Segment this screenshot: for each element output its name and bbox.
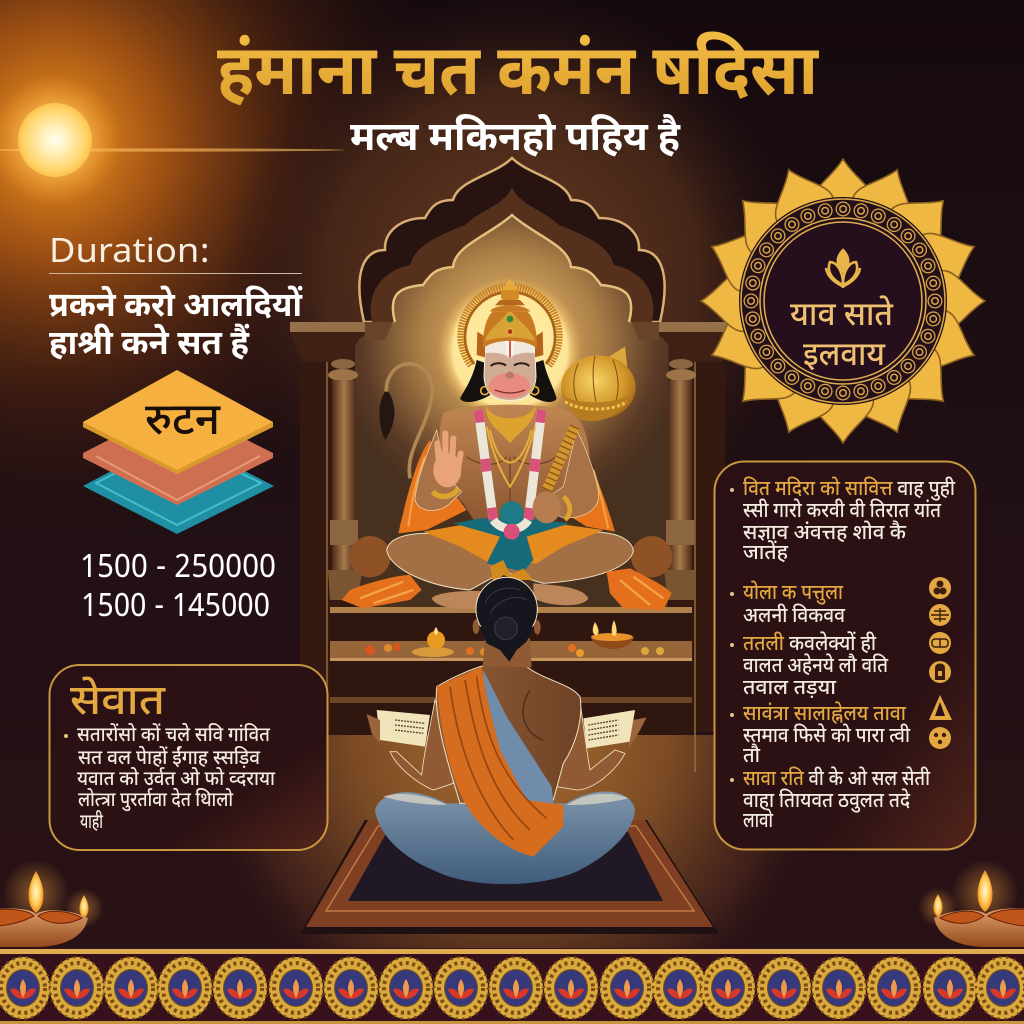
range numbers xyxy=(80,549,276,630)
crossed legs xyxy=(387,532,633,590)
arms xyxy=(415,430,599,518)
seated legs xyxy=(375,792,635,884)
duration block: हाश्री कने सत हैं xyxy=(49,323,250,368)
neck xyxy=(483,638,532,667)
temple architecture xyxy=(300,158,725,772)
middle arch band xyxy=(371,187,653,322)
title: हंमाना चत कमंन षदिसा xyxy=(217,31,819,123)
duration label: Duration: xyxy=(49,232,210,276)
halo xyxy=(435,275,585,425)
icon: three dots xyxy=(929,727,951,749)
outer scalloped arch xyxy=(359,158,665,322)
stacked layers icon xyxy=(83,370,274,534)
fruit offerings behind xyxy=(349,536,672,577)
torso xyxy=(439,405,590,525)
offerings plate and lit bowl on shelf xyxy=(365,620,664,657)
bullet points: सज्ञाव अंवत्तह शोव कै xyxy=(743,520,906,548)
lit niche xyxy=(355,215,668,610)
orange sash xyxy=(437,667,563,857)
icon: lock xyxy=(929,661,951,683)
left info panel xyxy=(50,665,328,850)
range numbers: 1500 - 145000 xyxy=(81,588,270,630)
icon: bell triangle xyxy=(929,695,952,720)
panel heading: सेवात xyxy=(70,676,167,732)
raised blessing hand xyxy=(433,433,461,496)
hair xyxy=(460,360,557,402)
bullet points: वाहा तिायवत ठवुलत तदे xyxy=(743,788,911,816)
devotee reading xyxy=(367,577,647,884)
panel bullet text xyxy=(64,722,276,837)
open book right page xyxy=(583,710,635,748)
subtitle: मल्ब मकिनहो पहिय है xyxy=(350,113,681,167)
icon: book xyxy=(929,604,951,626)
duration block xyxy=(49,232,303,368)
bullet points: वित मदिरा को सावित्त वाह पुही xyxy=(743,476,955,504)
bullet points: ततली कवलेक्यों ही xyxy=(743,631,876,659)
bullet points: स्सी गारो करवी वी तिरात यांत xyxy=(743,498,942,526)
mace xyxy=(547,347,636,490)
face xyxy=(481,341,539,401)
side walls xyxy=(300,332,355,732)
shrine steps xyxy=(330,607,692,735)
blue drape xyxy=(480,670,553,813)
crown halo ring xyxy=(462,287,558,365)
arms xyxy=(390,700,625,790)
panel bullet text: सतारोंसो कों चले सवि गांवित xyxy=(77,722,270,750)
shoulder blade xyxy=(523,690,543,740)
decorative bottom border xyxy=(0,948,1024,1024)
layer label: रुटन xyxy=(145,395,221,452)
right diya lamp xyxy=(918,859,1024,947)
bullet points: जातेंह xyxy=(743,540,789,568)
holding hand xyxy=(533,491,570,523)
lotus petals ring xyxy=(700,158,986,444)
bullet points xyxy=(730,476,955,836)
crown xyxy=(477,278,543,357)
small lotus icon xyxy=(826,250,860,288)
open book left page xyxy=(377,710,430,747)
bullet points: योला क पत्तुला xyxy=(743,580,843,608)
mandala badge: इलवाय xyxy=(803,336,886,379)
duration description: प्रकने करो आलदियों xyxy=(49,285,303,330)
shawl xyxy=(398,440,615,533)
right pillar xyxy=(631,322,732,600)
mandala badge xyxy=(700,158,986,444)
back xyxy=(436,665,581,803)
bullet points: अलनी विकवव xyxy=(743,603,846,631)
bullet points: वालत अहेनये लौ वति xyxy=(743,653,889,681)
bullet points: तवाल तड़या xyxy=(743,675,836,703)
necklace and garland xyxy=(478,403,542,540)
hands xyxy=(367,714,647,748)
prayer mat xyxy=(300,820,719,934)
bullet points: सावा रति वी के ओ सल सेती xyxy=(743,766,930,794)
left pillar xyxy=(290,322,393,600)
bullet points: स्तमाव फिसे को पारा त्वी xyxy=(743,723,910,751)
hanuman figure xyxy=(342,275,672,610)
bullet points: लावो xyxy=(743,808,773,836)
tail xyxy=(379,364,432,478)
left diya lamp xyxy=(0,859,104,947)
badge text: याव साते xyxy=(790,295,894,339)
ears xyxy=(473,619,541,635)
ornamental ring xyxy=(739,197,947,405)
panel bullet text: लोत्त्रा पुरर्तावा देत थिालो xyxy=(78,787,234,815)
sun with lens flare xyxy=(0,74,345,206)
icon: scroll xyxy=(929,632,951,654)
dhoti xyxy=(423,518,603,583)
head and hair xyxy=(476,577,537,662)
icon: people xyxy=(929,577,951,599)
panel bullet text: सत वल पेाहों ईंगाह स्सड़िव xyxy=(78,745,261,773)
bullet points: तौ xyxy=(743,743,760,771)
bullet points: सावंत्रा सालाह्नेलय तावा xyxy=(743,701,906,729)
range numbers: 1500 - 250000 xyxy=(80,549,276,591)
panel bullet text: यवात को उर्वत ओ फो व्दराया xyxy=(77,766,276,794)
orange cloth ends xyxy=(342,568,672,610)
panel bullet text: याही xyxy=(80,809,103,837)
floor xyxy=(0,735,1024,949)
right info panel xyxy=(714,462,976,850)
feet xyxy=(432,583,588,609)
